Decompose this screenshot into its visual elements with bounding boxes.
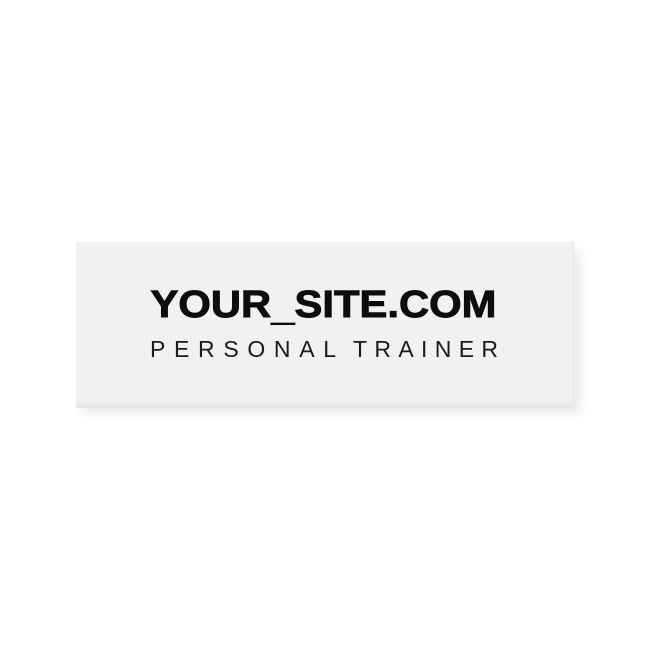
heading: site name: _ xyxy=(270,287,295,329)
subtitle: profession xyxy=(150,336,498,362)
subtitle: profession: PERSONAL xyxy=(150,336,336,362)
card shadow xyxy=(82,250,580,413)
heading: site name: YOUR xyxy=(150,284,260,326)
business card panel xyxy=(76,242,574,408)
heading: site name: SITE.COM xyxy=(294,284,496,326)
subtitle: profession: TRAINER xyxy=(353,336,498,362)
